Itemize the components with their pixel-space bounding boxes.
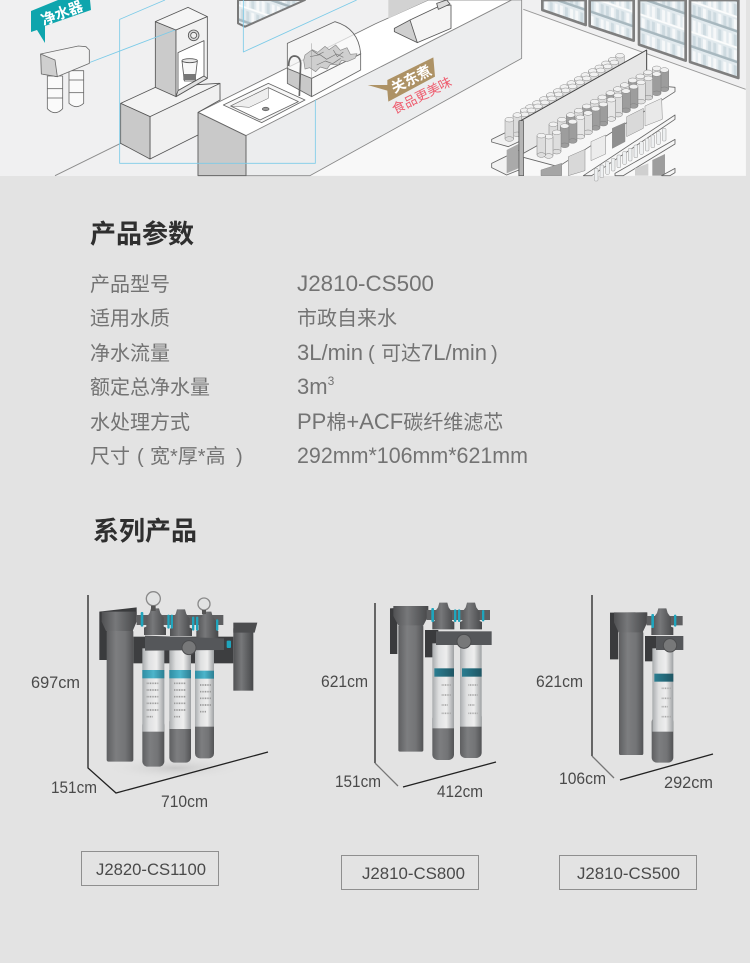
dimension axes <box>375 603 496 787</box>
floor shadow <box>105 756 245 780</box>
spec row: flow: ( <box>368 343 375 365</box>
spec row: total volume <box>90 374 335 399</box>
teal pipe rings <box>651 614 676 628</box>
rear shelf <box>492 126 519 147</box>
right small housing <box>233 623 257 691</box>
base block <box>121 83 220 159</box>
register box <box>394 0 451 43</box>
model label: J2810-CS800 <box>342 856 478 890</box>
shelf divider panel <box>519 50 647 176</box>
spec row: flow: 3L/min <box>297 340 363 365</box>
large pre-filter housing <box>614 612 647 755</box>
counter top <box>198 0 512 136</box>
scene wall background <box>0 0 746 176</box>
store floor <box>310 9 746 176</box>
front cylinders <box>537 66 669 158</box>
filter cartridge one <box>142 608 166 767</box>
product: J2810-CS800 figure <box>321 603 496 801</box>
wall bracket and back plate <box>390 606 438 657</box>
filter cartridge one <box>432 603 454 760</box>
shelf unit <box>492 50 675 181</box>
wall bracket and back plate <box>610 612 658 661</box>
spec row: flow <box>90 340 498 365</box>
dimension: height: 621cm <box>536 673 583 691</box>
large pre-filter housing <box>102 612 137 762</box>
pressure gauges <box>146 592 210 614</box>
spec row: size: ) <box>236 446 243 468</box>
dimension: depth: 151cm <box>51 779 97 797</box>
callout: 净水器 bubble <box>31 0 91 43</box>
spec row: water type <box>90 307 397 330</box>
spec row: model <box>90 271 434 296</box>
dimension: height: 697cm <box>31 674 80 692</box>
manifold bar <box>436 631 492 645</box>
dimension: width: 412cm <box>437 783 483 801</box>
wall bracket <box>99 607 137 660</box>
rear cylinders <box>505 53 624 141</box>
spec row: model: J2810-CS500 <box>297 271 434 296</box>
icon: purifier unit <box>41 46 89 113</box>
goods boxes under top shelf <box>541 98 662 176</box>
heading: series products: 系列产品 <box>93 516 197 546</box>
lower shelves with bottles <box>583 115 675 181</box>
pipes <box>137 615 223 625</box>
manifold knob <box>182 641 196 655</box>
model label: J2820-CS1100: J2820-CS1100 <box>96 861 206 879</box>
filter cartridge <box>651 608 673 763</box>
illustration: isometric store scene <box>0 0 746 181</box>
countertop display case <box>287 22 361 97</box>
dimension: height: 621cm <box>321 673 368 691</box>
teal pipe rings <box>141 612 218 631</box>
dimension: width: 292cm <box>664 774 713 792</box>
connection lines in blue <box>90 0 357 163</box>
counter front face <box>246 0 522 176</box>
teal valve <box>227 641 231 648</box>
tag: 关东煮 <box>368 57 435 102</box>
spec row: size: ( <box>137 446 144 468</box>
filter cartridge three <box>195 612 218 758</box>
spec row: flow: 7L/min <box>421 340 487 365</box>
spec row: size: 宽*厚*高 <box>150 445 226 468</box>
spec row: size <box>90 443 528 468</box>
spec row: flow: 净水流量 <box>90 342 170 365</box>
dimension axes <box>88 595 268 793</box>
tag: 关东煮: 关东煮 <box>388 61 434 97</box>
manifold knob <box>663 639 677 652</box>
product: J2820-CS1100 figure <box>31 592 268 811</box>
pipes <box>427 610 490 620</box>
spec row: treatment <box>90 409 503 434</box>
fridge doors <box>542 0 738 78</box>
spec table <box>90 271 528 468</box>
sink <box>223 83 305 123</box>
spec row: size: 292mm*106mm*621mm <box>297 443 528 468</box>
spec row: water type: 适用水质 <box>90 307 170 330</box>
dimension: depth: 106cm <box>559 770 606 788</box>
shelf upright post <box>519 121 524 176</box>
grey wall panel behind counter <box>388 0 428 18</box>
large pre-filter housing <box>393 606 428 752</box>
front top shelf <box>523 85 675 167</box>
spec row: model: 产品型号 <box>90 273 170 296</box>
fridge on back wall <box>238 0 305 27</box>
rear boxes <box>507 144 518 173</box>
spec row: flow: 可达 <box>381 342 421 365</box>
coffee machine <box>155 7 207 97</box>
model label: J2810-CS500: J2810-CS500 <box>577 865 680 883</box>
manifold bar <box>145 636 224 651</box>
floor line left <box>55 143 121 176</box>
floor and wall line <box>523 9 746 89</box>
heading: product parameters: 产品参数 <box>90 219 194 249</box>
spec row: water type: 市政自来水 <box>297 307 397 330</box>
spec row: size: 尺寸 <box>90 446 130 468</box>
back plate <box>133 637 233 663</box>
product: J2810-CS500 figure <box>536 595 713 792</box>
rear shelf lower <box>492 150 519 175</box>
spec row: total volume: 3m <box>297 374 328 399</box>
counter left face <box>198 112 246 176</box>
filter cartridge two <box>460 603 482 758</box>
teal pipe rings <box>431 608 484 622</box>
spec row: total volume: 额定总净水量 <box>90 376 210 399</box>
spec row: treatment: 水处理方式 <box>90 411 190 434</box>
dimension: width: 710cm <box>161 793 208 811</box>
dimension: depth: 151cm <box>335 773 381 791</box>
filter cartridge two <box>169 609 192 763</box>
manifold bar <box>656 636 683 650</box>
faucet <box>289 56 301 96</box>
spec row: treatment: PP棉+ACF碳纤维滤芯 <box>297 409 503 434</box>
tagline: 食品更美味: 食品更美味 <box>390 74 454 117</box>
manifold knob <box>457 634 471 648</box>
model label: J2820-CS1100 <box>82 852 218 886</box>
spec row: flow: ) <box>491 343 498 365</box>
model label: J2810-CS800: J2810-CS800 <box>362 865 465 883</box>
spec row: total volume: 3 <box>328 374 335 388</box>
pipes <box>647 616 683 625</box>
dimension axes <box>592 595 713 780</box>
model label: J2810-CS500 <box>560 856 696 890</box>
